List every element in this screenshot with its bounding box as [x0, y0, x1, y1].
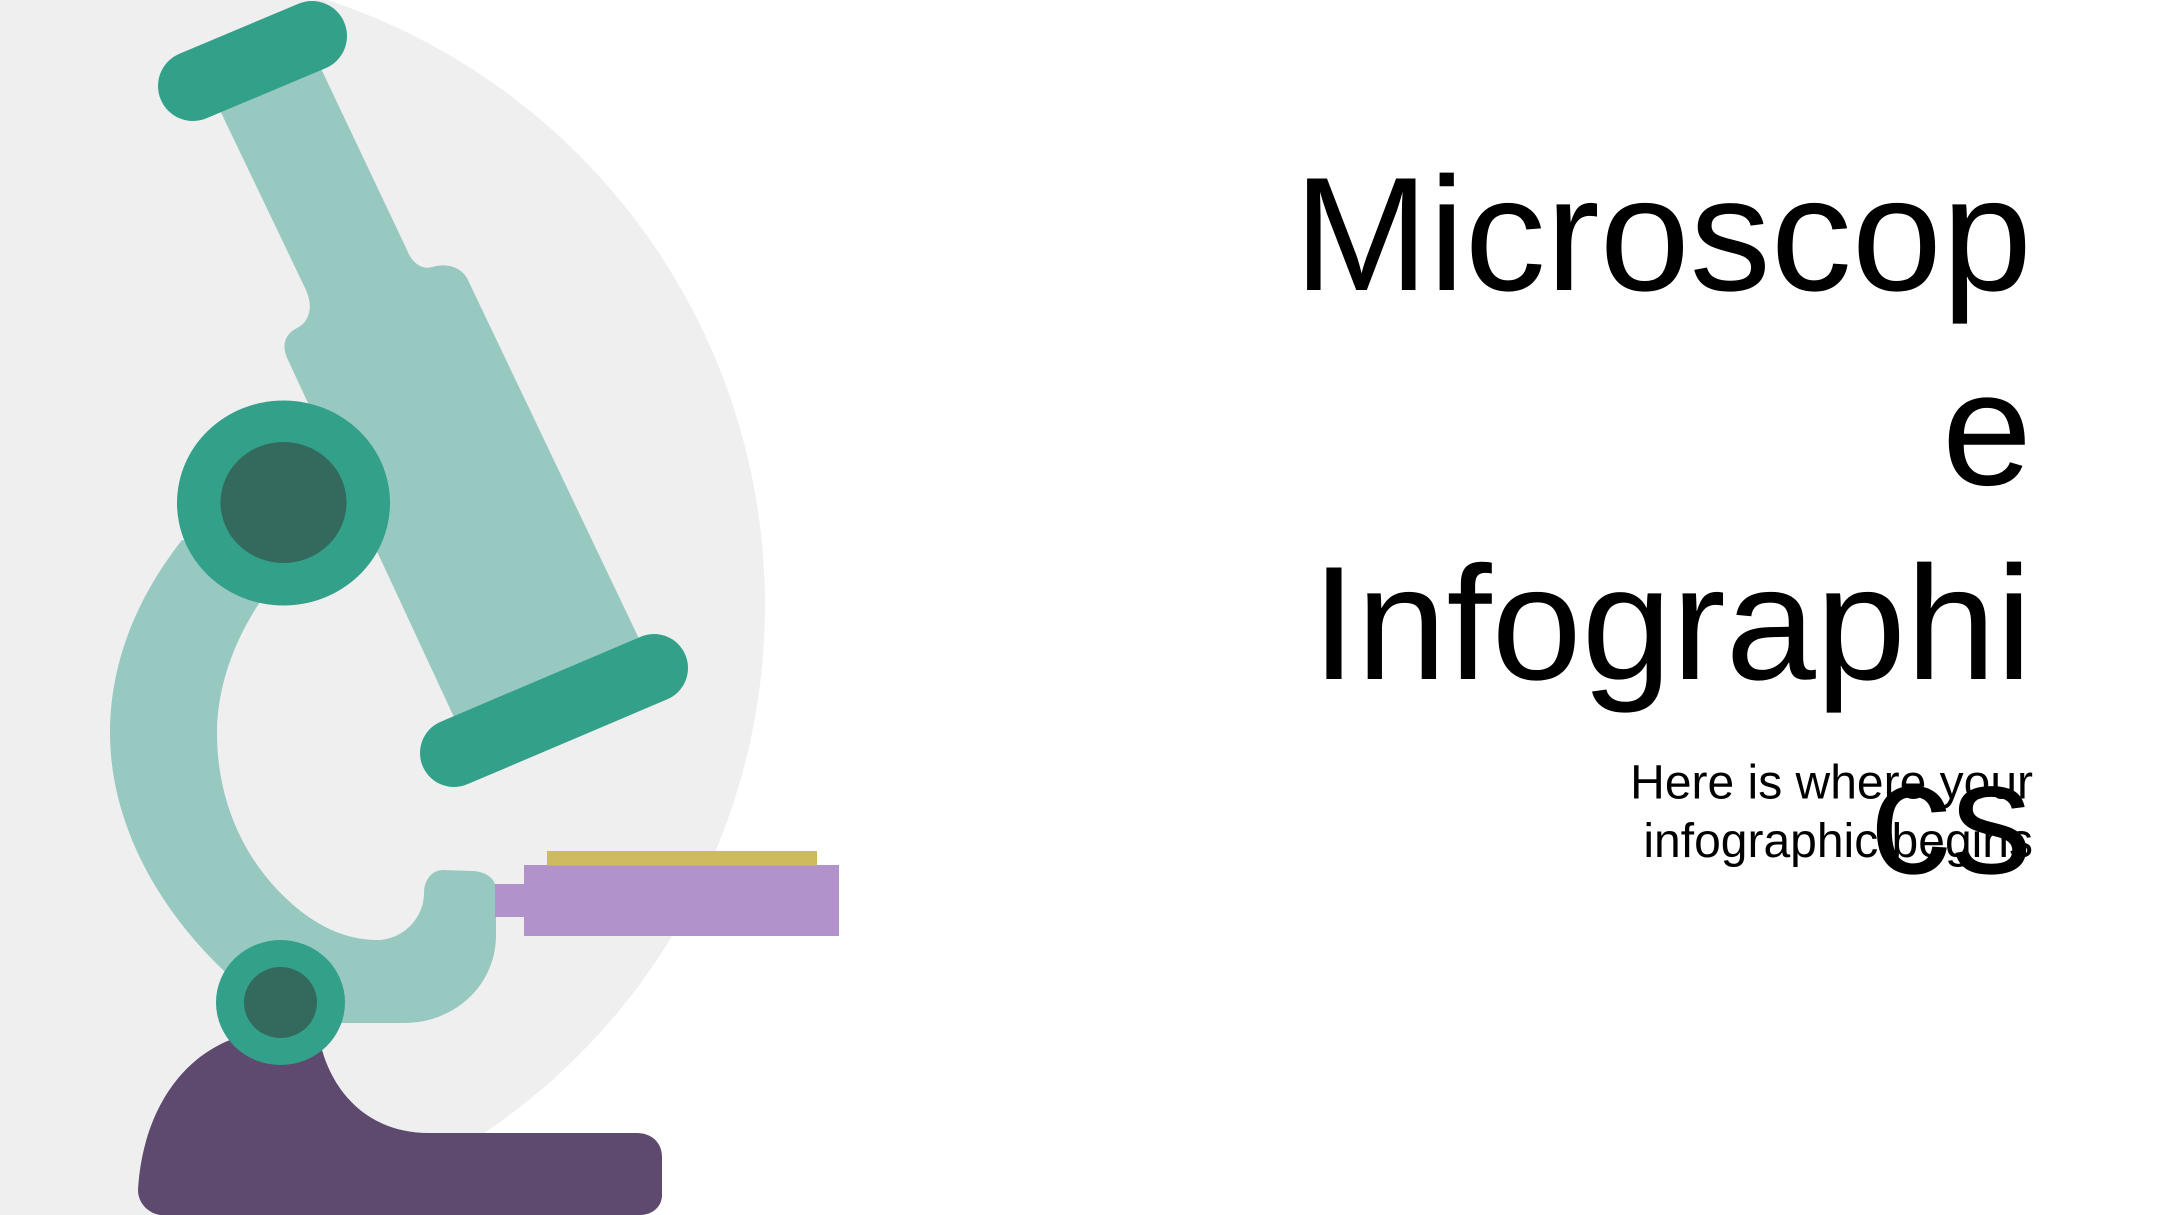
objective lens bar [454, 668, 654, 753]
stage connector [495, 884, 525, 917]
focus knob large [177, 400, 390, 606]
stage [524, 865, 839, 936]
title: e [1942, 338, 2032, 520]
eyepiece [193, 36, 312, 86]
title: Microscop [1294, 144, 2032, 325]
title: Infographi [1311, 533, 2032, 714]
microscope illustration [110, 36, 839, 1215]
base [138, 1000, 662, 1215]
background circle [0, 0, 765, 1215]
microscope arm [110, 540, 496, 1023]
title: cs [1870, 727, 2032, 908]
focus knob small [216, 940, 345, 1065]
microscope tube [215, 58, 642, 730]
subtitle: Here is where your [1630, 756, 2033, 810]
title [1294, 144, 2032, 908]
glass slide [547, 851, 817, 866]
subtitle: infographic begins [1643, 815, 2033, 868]
subtitle [1630, 756, 2033, 868]
